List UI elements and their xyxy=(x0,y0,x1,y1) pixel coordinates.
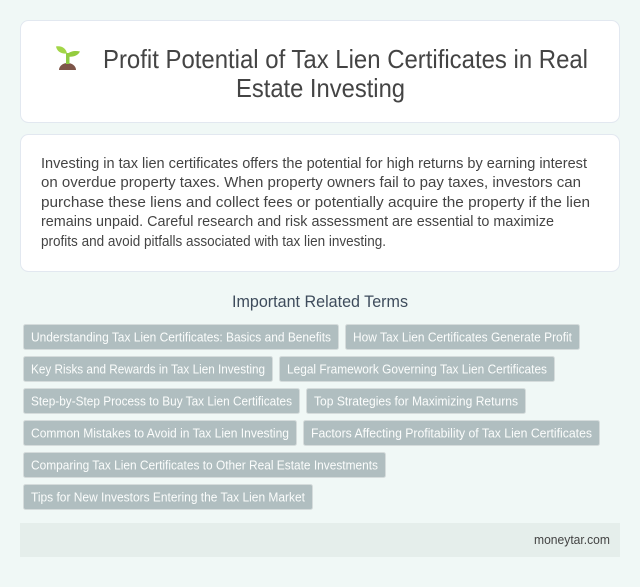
tag xyxy=(306,388,526,414)
panel: summary text xyxy=(20,134,620,272)
tag: Comparing Tax Lien Certificates to Other Real Estate Investments xyxy=(31,458,378,472)
tag xyxy=(24,452,386,478)
tag: How Tax Lien Certificates Generate Profit xyxy=(353,330,572,344)
text block: summary xyxy=(41,155,590,250)
text block: summary: profits and avoid pitfalls associated with tax lien investing. xyxy=(41,233,386,250)
title: Estate Investing xyxy=(236,73,405,103)
tag xyxy=(24,324,338,350)
tag xyxy=(24,484,312,510)
tag: Key Risks and Rewards in Tax Lien Investing xyxy=(31,362,265,376)
text block: summary: purchase these liens and collect fees or potentially acquire the property if the lien xyxy=(41,194,590,211)
tag xyxy=(24,356,272,382)
heading: related terms: Important Related Terms xyxy=(232,293,408,311)
text block: summary: on overdue property taxes. When property owners fail to pay taxes, investors can xyxy=(41,174,581,191)
tag xyxy=(346,324,580,350)
footer xyxy=(20,523,620,557)
panel: header xyxy=(20,20,620,122)
icon: sprout xyxy=(56,46,80,70)
tag: Tips for New Investors Entering the Tax Lien Market xyxy=(31,490,305,504)
footer source: moneytar.com xyxy=(534,533,610,547)
tag: Common Mistakes to Avoid in Tax Lien Investing xyxy=(31,426,289,440)
tag: Top Strategies for Maximizing Returns xyxy=(314,394,518,408)
tag xyxy=(24,420,296,446)
panel: related term tags xyxy=(24,324,600,510)
text block: summary: remains unpaid. Careful research and risk assessment are essential to maximize xyxy=(41,213,554,230)
tag xyxy=(280,356,554,382)
tag xyxy=(24,388,300,414)
tag: Understanding Tax Lien Certificates: Basics and Benefits xyxy=(31,330,331,344)
title: Profit Potential of Tax Lien Certificates in Real xyxy=(103,44,588,74)
tag: Legal Framework Governing Tax Lien Certificates xyxy=(287,362,547,376)
title xyxy=(103,44,588,103)
tag: Step-by-Step Process to Buy Tax Lien Certificates xyxy=(31,394,292,408)
text block: summary: Investing in tax lien certificates offers the potential for high returns by earning interest xyxy=(41,155,588,172)
tag: Factors Affecting Profitability of Tax Lien Certificates xyxy=(311,426,592,440)
tag xyxy=(304,420,600,446)
